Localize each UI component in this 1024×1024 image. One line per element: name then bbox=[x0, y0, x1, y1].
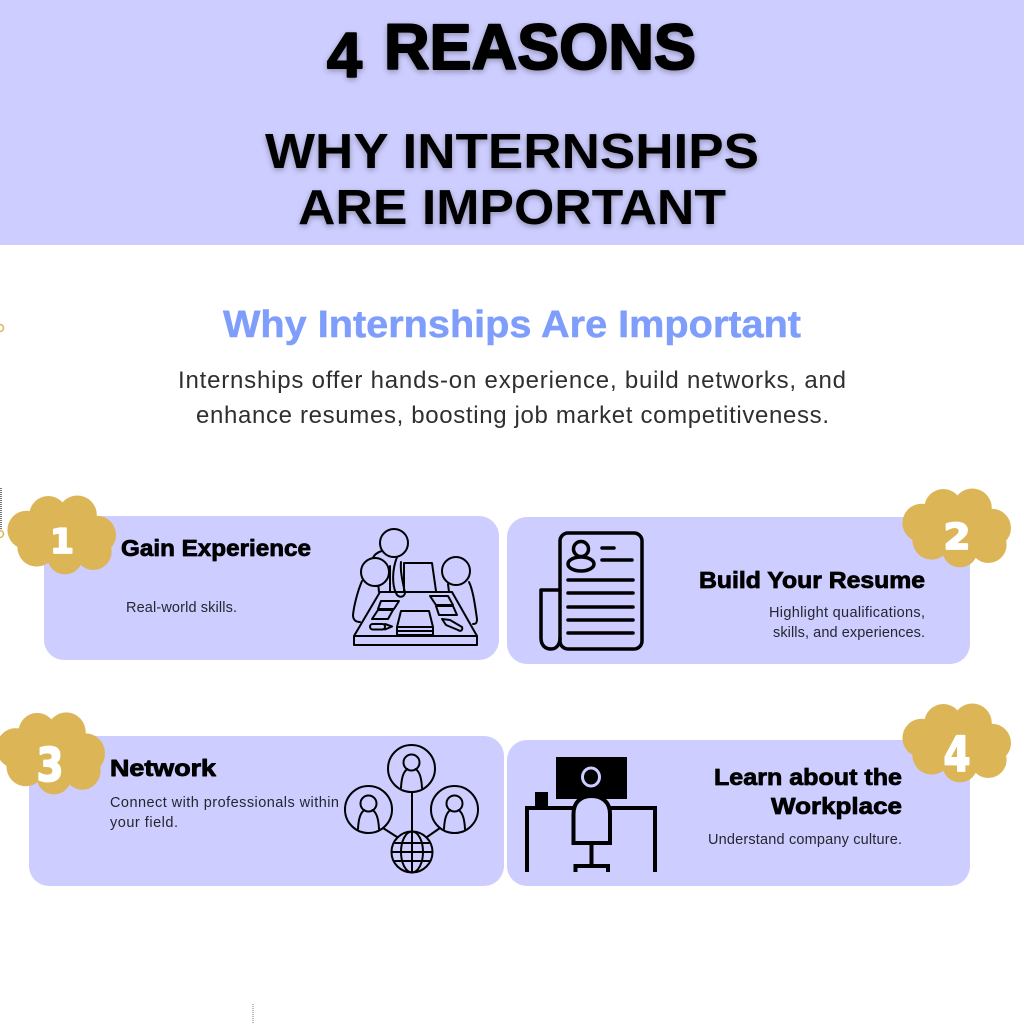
title: why internships are important: WHY INTERNSHIPS bbox=[265, 125, 759, 179]
heading: learn about the workplace bbox=[714, 764, 902, 819]
header band bbox=[0, 0, 1024, 245]
section heading: Why Internships Are Important bbox=[223, 304, 801, 346]
panel: learn about the workplace bbox=[507, 704, 1011, 886]
title: 4 reasons: REASONS bbox=[384, 11, 696, 83]
badge 3 bbox=[0, 712, 105, 794]
text: highlight qualifications bbox=[769, 605, 925, 641]
intro text bbox=[178, 367, 846, 429]
title: why internships are important: ARE IMPORTANT bbox=[298, 181, 726, 235]
text: connect with professionals bbox=[110, 795, 339, 831]
icon: people network bbox=[345, 745, 478, 872]
icon: resume document bbox=[541, 533, 642, 649]
heading: learn about the workplace: Workplace bbox=[771, 793, 902, 819]
text: understand company culture: Understand company culture. bbox=[708, 832, 902, 848]
panel: gain experience bbox=[7, 496, 499, 660]
badge 4: 4 bbox=[944, 727, 970, 783]
icon: team meeting bbox=[353, 529, 477, 645]
panel: network bbox=[0, 712, 504, 886]
badge 4 bbox=[902, 704, 1011, 783]
text: real-world skills: Real-world skills. bbox=[126, 600, 237, 616]
badge 2 bbox=[902, 488, 1011, 567]
heading: build your resume: Build Your Resume bbox=[699, 567, 925, 593]
icon: desk and monitor bbox=[527, 757, 655, 872]
panel: build your resume bbox=[507, 488, 1011, 664]
badge 1: 1 bbox=[50, 522, 74, 562]
text: connect with professionals: Connect with professionals within bbox=[110, 795, 339, 811]
intro text: enhance resumes, boosting job market competitiveness. bbox=[196, 402, 829, 429]
heading: gain experience: Gain Experience bbox=[121, 535, 311, 561]
title: why internships are important bbox=[265, 125, 759, 235]
text: highlight qualifications: skills, and experiences. bbox=[773, 625, 925, 641]
stray guide marks bbox=[0, 324, 253, 1023]
intro text: Internships offer hands-on experience, build networks, and bbox=[178, 367, 846, 394]
badge 2: 2 bbox=[944, 517, 970, 558]
title: 4 reasons: 4 bbox=[327, 21, 362, 91]
heading: learn about the workplace: Learn about the bbox=[714, 764, 902, 790]
heading: network: Network bbox=[110, 755, 217, 781]
badge 1 bbox=[7, 496, 116, 574]
badge 3: 3 bbox=[36, 738, 64, 792]
text: connect with professionals: your field. bbox=[110, 815, 178, 831]
text: highlight qualifications: Highlight qualifications, bbox=[769, 605, 925, 621]
